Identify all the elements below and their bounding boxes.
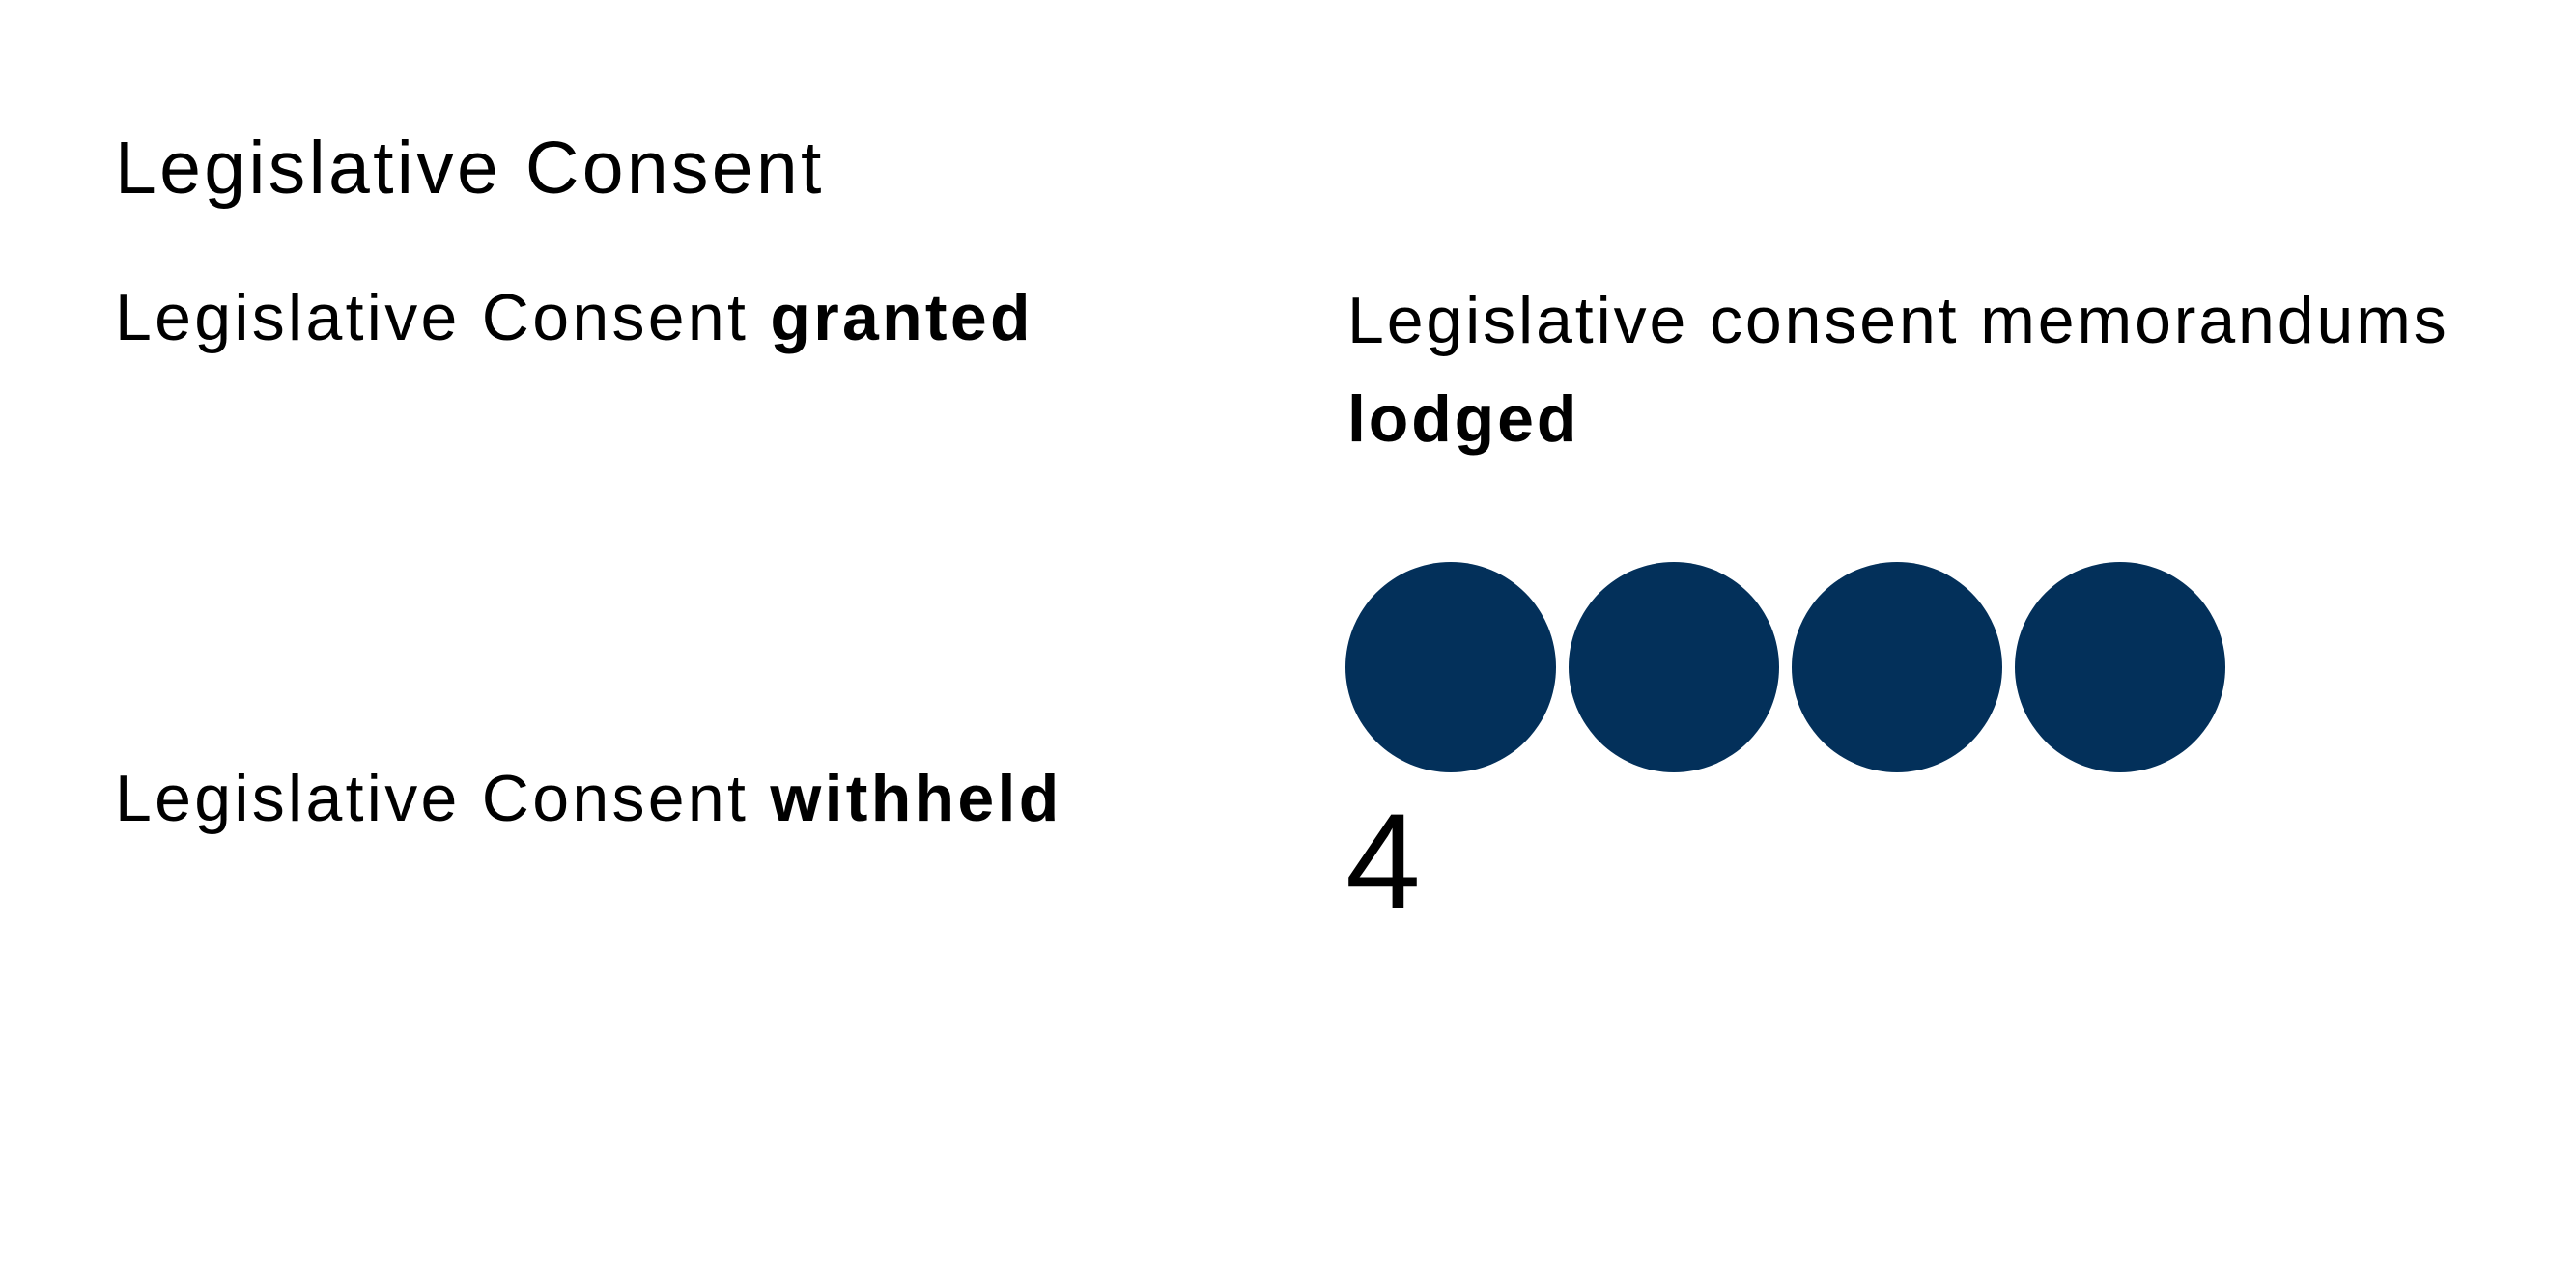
text: consent granted: Legislative Consent granted [115,281,1033,354]
title: Legislative Consent [115,126,825,210]
icon: circles [1345,562,2225,772]
number: 4: 4 [1345,785,1424,937]
heading: memorandums lodged: lodged [1347,382,1579,456]
panel: memorandums lodged [1345,284,2449,937]
text: consent withheld: Legislative Consent withheld [115,762,1062,835]
heading: memorandums lodged [1347,284,2449,456]
heading: memorandums lodged: Legislative consent memorandums [1347,284,2449,357]
